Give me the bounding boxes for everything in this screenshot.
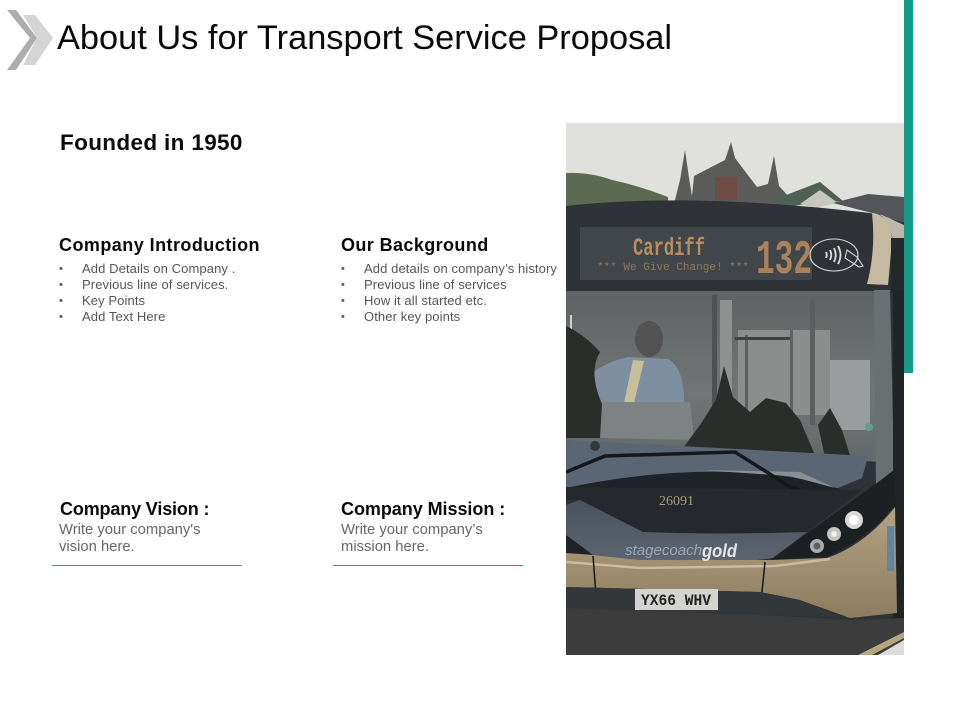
wiper	[566, 452, 803, 495]
destination board: Cardiff	[633, 234, 705, 263]
list: introduction points: Previous line of services.	[82, 277, 228, 292]
gold pillar	[867, 213, 892, 285]
list: introduction points	[59, 261, 235, 324]
church building	[675, 142, 904, 222]
number plate: YX66 WHV	[641, 592, 711, 610]
underline: vision	[52, 565, 242, 566]
brand logo: gold	[701, 541, 738, 561]
heading: our background: Our Background	[341, 235, 489, 255]
text: mission	[341, 522, 483, 555]
driver	[576, 321, 684, 418]
list: background points: How it all started etc.	[364, 293, 487, 308]
interior reflections	[570, 295, 870, 430]
destination board	[580, 227, 812, 288]
text: vision: Write your company's	[59, 522, 201, 538]
heading: company introduction: Company Introduction	[59, 235, 260, 255]
list: introduction points: Add Text Here	[82, 309, 165, 324]
panel: company mission	[333, 499, 523, 566]
contactless symbol	[810, 239, 863, 271]
title: About Us for Transport Service Proposal	[57, 19, 672, 57]
panel: company introduction	[59, 235, 260, 324]
destination board: *** We Give Change! ***	[597, 262, 749, 274]
destination board: 132	[756, 234, 812, 288]
headlight cluster	[770, 470, 895, 560]
brand logo: stagecoach	[625, 542, 702, 559]
teal accent bar	[904, 0, 913, 373]
brand logo	[625, 541, 738, 561]
text: mission: mission here.	[341, 539, 429, 555]
heading: company mission: Company Mission :	[341, 499, 505, 519]
grey body panel	[566, 500, 807, 562]
lower windscreen band	[566, 440, 868, 488]
hill	[566, 173, 668, 212]
road	[566, 608, 904, 655]
fleet number: 26091	[659, 494, 694, 509]
panel: our background	[341, 235, 557, 324]
list: background points	[341, 261, 557, 324]
gold bumper	[566, 507, 897, 618]
underline: mission	[333, 565, 523, 566]
list: background points: Add details on company’s history	[364, 261, 557, 276]
list: background points: Previous line of services	[364, 277, 507, 292]
lower dark bumper	[566, 587, 840, 617]
icon: double chevron	[7, 10, 53, 70]
list: introduction points: Key Points	[82, 293, 145, 308]
panel: company vision	[52, 499, 242, 566]
sky	[566, 123, 904, 655]
list: introduction points: Add Details on Company .	[82, 261, 235, 276]
black panel	[566, 487, 862, 534]
list: background points: Other key points	[364, 309, 460, 324]
reflected trees	[566, 326, 852, 462]
bus body	[566, 200, 904, 655]
text: mission: Write your company’s	[341, 522, 483, 538]
photo: front of bus	[566, 123, 904, 655]
text: vision: vision here.	[59, 539, 135, 555]
seat and console	[600, 402, 694, 440]
windscreen	[566, 291, 878, 462]
blue side label	[887, 526, 894, 571]
side pillars	[874, 290, 894, 485]
heading: company vision: Company Vision :	[60, 499, 209, 519]
heading: founded: Founded in 1950	[60, 130, 243, 155]
text: vision	[59, 522, 201, 555]
